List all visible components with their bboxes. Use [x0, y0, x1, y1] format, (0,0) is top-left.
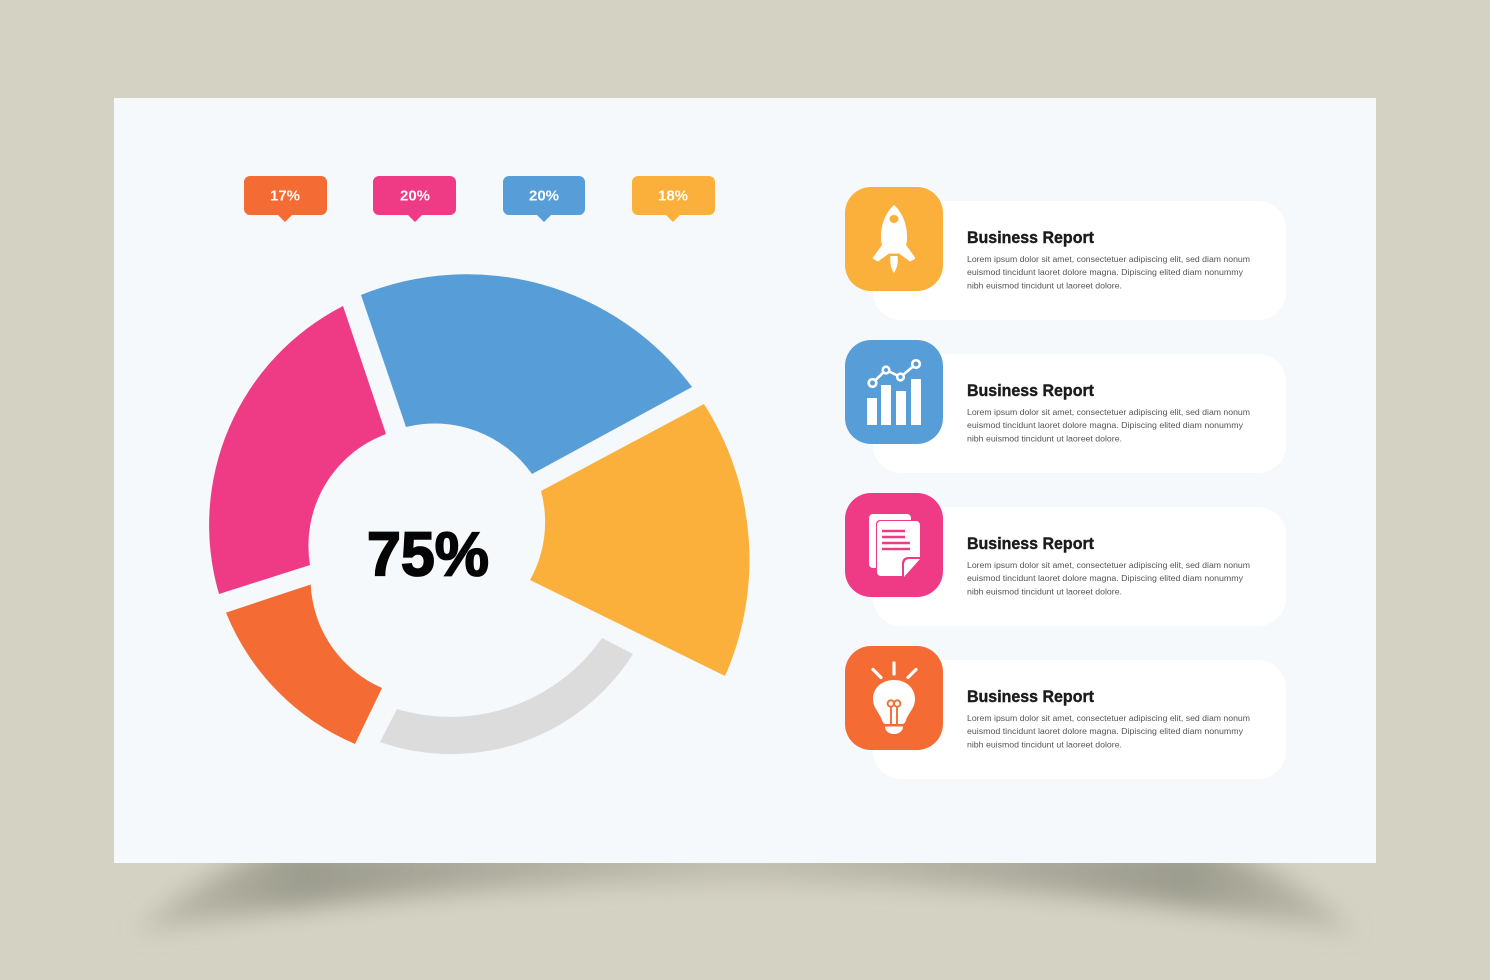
heading: Business Report — [967, 687, 1094, 706]
segment: pink — [209, 306, 386, 594]
card background — [873, 660, 1286, 779]
body text: nibh euismod tincidunt ut laoreet dolore. — [967, 280, 1122, 290]
center value: 75% — [367, 520, 489, 590]
heading: Business Report — [967, 534, 1094, 553]
body text: Lorem ipsum dolor sit amet, consectetuer adipiscing elit, sed diam nonum — [967, 560, 1250, 570]
card 3 — [845, 493, 1286, 626]
heading: Business Report — [967, 228, 1094, 247]
panel shadow — [135, 845, 1355, 932]
icon tile: rocket — [845, 187, 943, 291]
body text — [967, 254, 1250, 290]
body text — [967, 713, 1250, 750]
tag: 20% blue: 20% — [529, 188, 559, 204]
tag: 17%: 17% — [270, 188, 300, 204]
segment: blue — [361, 274, 692, 474]
donut chart — [209, 274, 749, 754]
percentage tags — [244, 176, 715, 222]
card 1 — [845, 187, 1286, 320]
body text: euismod tincidunt laoret dolore magna. Dipiscing elited diam nonummy — [967, 420, 1244, 430]
body text: Lorem ipsum dolor sit amet, consectetuer adipiscing elit, sed diam nonum — [967, 254, 1250, 264]
segment: orange — [226, 584, 382, 744]
tag: 17% — [244, 176, 327, 222]
tag: 20% pink: 20% — [400, 188, 430, 204]
card background — [873, 507, 1286, 626]
body text — [967, 560, 1250, 596]
tag: 20% blue — [503, 176, 585, 222]
card background — [873, 201, 1286, 320]
body text: euismod tincidunt laoret dolore magna. Dipiscing elited diam nonummy — [967, 726, 1244, 736]
body text: Lorem ipsum dolor sit amet, consectetuer adipiscing elit, sed diam nonum — [967, 713, 1250, 723]
body text — [967, 407, 1250, 444]
body text: nibh euismod tincidunt ut laoreet dolore. — [967, 434, 1122, 444]
card 4 — [845, 646, 1286, 779]
tag: 18% — [632, 176, 715, 222]
icon tile: light bulb — [845, 646, 943, 750]
body text: euismod tincidunt laoret dolore magna. Dipiscing elited diam nonummy — [967, 573, 1244, 583]
segment: yellow — [530, 404, 749, 676]
segment: grey remainder — [380, 638, 633, 754]
card background — [873, 354, 1286, 473]
body text: nibh euismod tincidunt ut laoreet dolore. — [967, 740, 1122, 750]
icon tile: documents — [845, 493, 943, 597]
card 2 — [845, 340, 1286, 473]
main panel — [114, 98, 1376, 863]
icon tile: bar chart — [845, 340, 943, 444]
heading: Business Report — [967, 381, 1094, 400]
body text: Lorem ipsum dolor sit amet, consectetuer adipiscing elit, sed diam nonum — [967, 407, 1250, 417]
tag: 20% pink — [373, 176, 456, 222]
body text: euismod tincidunt laoret dolore magna. Dipiscing elited diam nonummy — [967, 267, 1244, 277]
tag: 18%: 18% — [658, 188, 688, 204]
body text: nibh euismod tincidunt ut laoreet dolore. — [967, 586, 1122, 596]
